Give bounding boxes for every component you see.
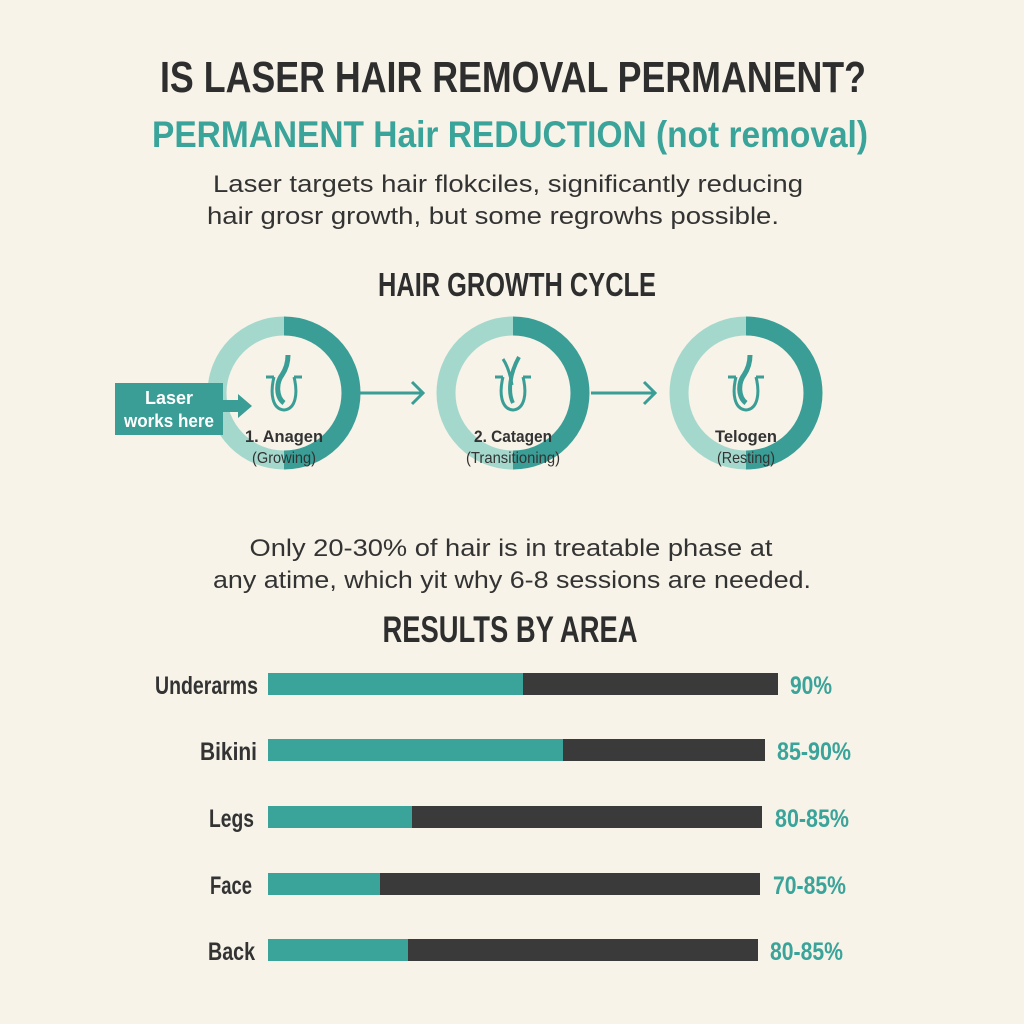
arrow 2 (591, 382, 655, 404)
heading: results by area: RESULTS BY AREA (382, 609, 638, 650)
stage: catagen: 2. Catagen (474, 427, 552, 446)
bar: back: 80-85% (770, 938, 843, 966)
bar chart (155, 672, 851, 966)
stage: catagen: (Transitioning) (466, 450, 560, 467)
callout: laser works here: works here (123, 411, 214, 431)
stage: anagen: 1. Anagen (245, 427, 323, 446)
title: IS LASER HAIR REMOVAL PERMANENT? (160, 53, 866, 102)
bar: legs (209, 805, 849, 833)
stage: telogen: Telogen (715, 427, 777, 446)
intro text: hair grosr growth, but some regrowhs possible. (207, 203, 779, 230)
bar: face: 70-85% (773, 872, 846, 900)
stage: telogen: (Resting) (717, 450, 775, 467)
bar: bikini: Bikini (200, 738, 257, 766)
bar: face (210, 872, 846, 900)
heading: hair growth cycle: HAIR GROWTH CYCLE (378, 266, 656, 303)
bar: legs: 80-85% (775, 805, 849, 833)
bar: underarms: Underarms (155, 672, 258, 700)
arrow 1 (360, 382, 423, 404)
stage: telogen (679, 326, 813, 467)
note text (213, 535, 811, 594)
intro text: Laser targets hair flokciles, significantly reducing (213, 171, 803, 198)
note text: Only 20-30% of hair is in treatable phase at (250, 535, 773, 562)
bar: bikini (200, 738, 851, 766)
note text: any atime, which yit why 6-8 sessions are needed. (213, 567, 811, 594)
stage: anagen: (Growing) (252, 450, 316, 467)
bar: back: Back (208, 938, 255, 966)
stage: catagen (446, 326, 580, 467)
bar: underarms: 90% (790, 672, 832, 700)
bar: legs: Legs (209, 805, 254, 833)
callout: laser works here (115, 383, 252, 435)
bar: bikini: 85-90% (777, 738, 851, 766)
bar: face: Face (210, 872, 252, 900)
subtitle: PERMANENT Hair REDUCTION (not removal) (152, 114, 868, 155)
cycle diagram (115, 326, 813, 467)
callout: laser works here: Laser (145, 388, 193, 408)
bar: back (208, 938, 843, 966)
stage: anagen (217, 326, 351, 467)
bar: underarms (155, 672, 832, 700)
intro text (207, 171, 803, 230)
